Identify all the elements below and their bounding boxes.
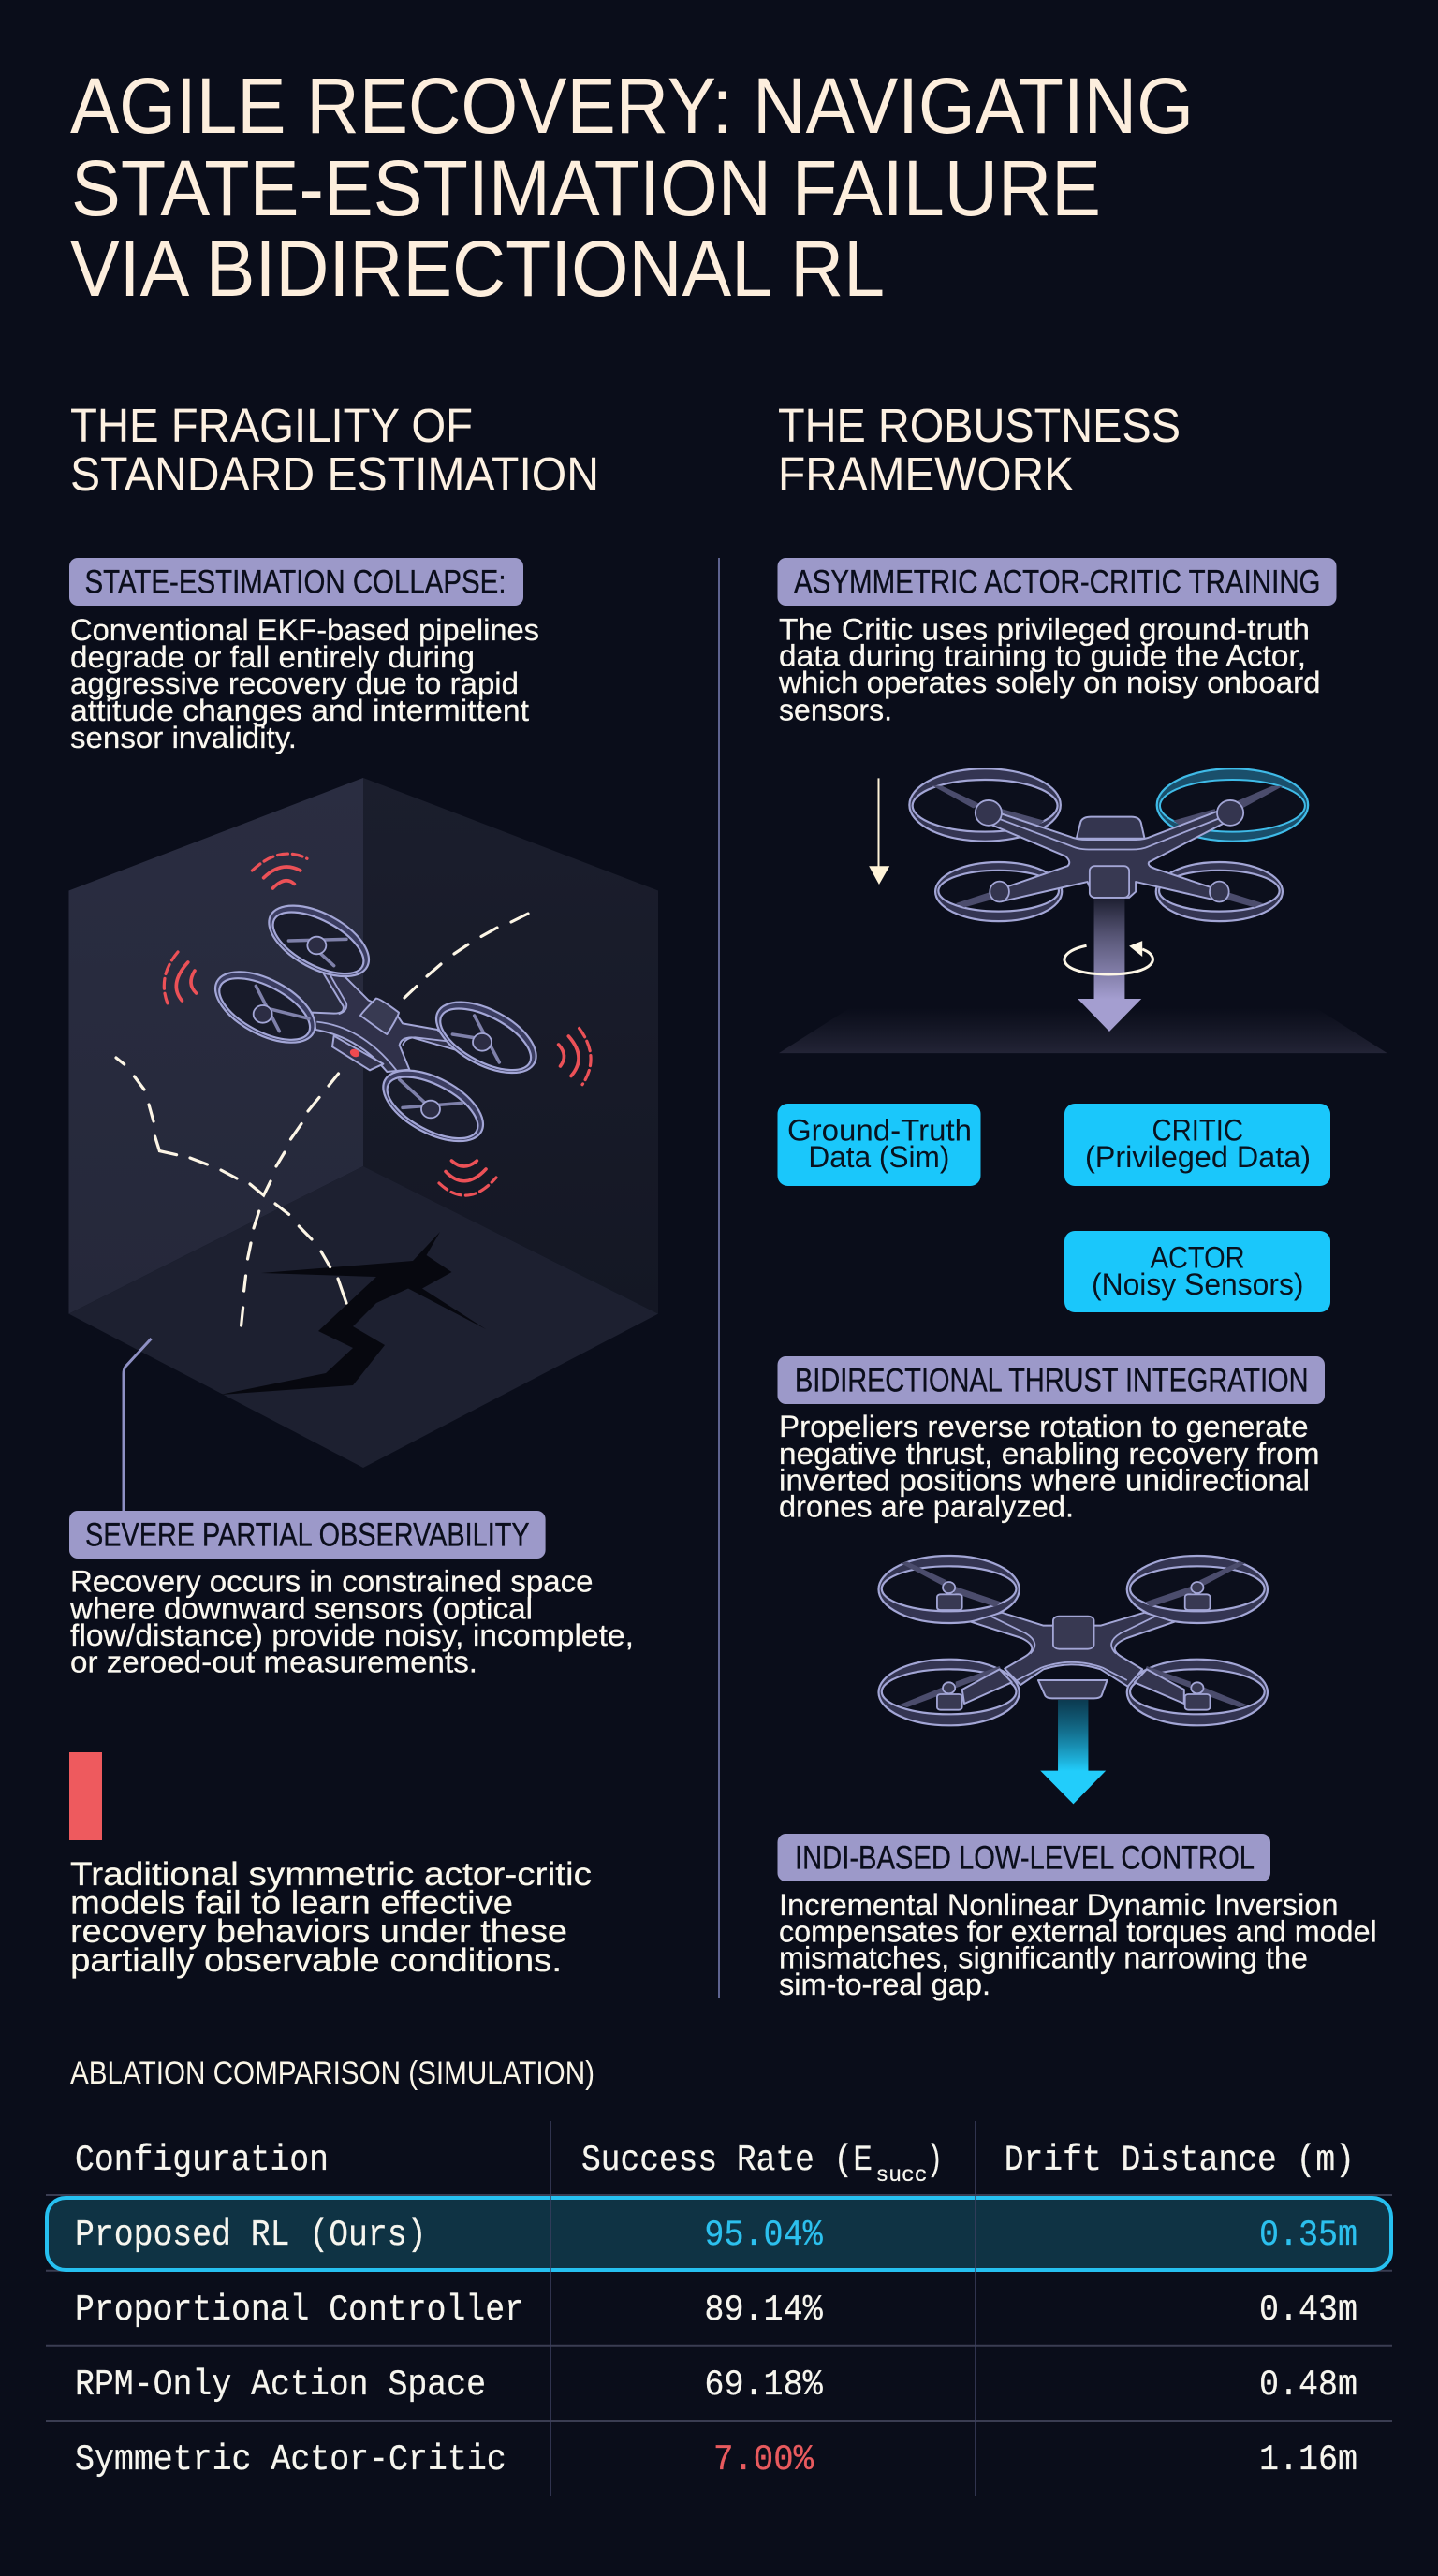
text: state-estimation collapse description: aggressive recovery due to rapid (70, 666, 519, 700)
title: VIA BIDIRECTIONAL RL (70, 225, 885, 313)
badge: severe partial observability: SEVERE PARTIAL OBSERVABILITY (85, 1516, 530, 1553)
heading: the robustness framework: FRAMEWORK (778, 447, 1074, 501)
room: floor (69, 1166, 658, 1468)
row: proposed rl: Proposed RL (Ours) (75, 2215, 427, 2256)
title (70, 62, 1194, 313)
text: severe partial observability description: Recovery occurs in constrained space (70, 1565, 594, 1599)
text: bidirectional thrust description (779, 1410, 1320, 1524)
text: asymmetric training description: data during training to guide the Actor, (779, 639, 1306, 673)
table heading: ABLATION COMPARISON (SIMULATION) (70, 2056, 594, 2091)
badge: bidirectional thrust integration (777, 1356, 1325, 1404)
text: severe partial observability description: flow/distance) provide noisy, incomplete, (70, 1618, 634, 1652)
row: symmetric actor-critic: Symmetric Actor-Critic (75, 2439, 506, 2481)
sensor noise arcs (164, 854, 591, 1195)
badge: asymmetric actor-critic training (777, 558, 1337, 606)
illustration: upright drone with gravity and yaw (779, 768, 1387, 1053)
rotors (909, 768, 1308, 921)
text: indi control description: mismatches, significantly narrowing the (779, 1941, 1308, 1975)
text: severe partial observability description: or zeroed-out measurements. (70, 1645, 477, 1678)
text: state-estimation collapse description (70, 613, 539, 754)
badge: state-estimation collapse (69, 558, 523, 606)
heading: the robustness framework (778, 399, 1181, 501)
text: asymmetric training description: sensors. (779, 693, 892, 726)
box: ground-truth data: Data (Sim) (808, 1140, 949, 1174)
box: actor (1064, 1231, 1330, 1312)
row: proposed rl: 0.35m (1259, 2215, 1357, 2256)
badge: indi-based low-level control: INDI-BASED LOW-LEVEL CONTROL (795, 1840, 1255, 1877)
rotation arc (1064, 941, 1152, 974)
row: rpm-only action space: 0.48m (1259, 2364, 1357, 2406)
badge: severe partial observability (69, 1511, 546, 1559)
text: symmetric actor-critic failure (70, 1856, 592, 1979)
comparison table (46, 2121, 1392, 2496)
gravity arrow (869, 778, 889, 885)
table header: Drift Distance (m) (1005, 2140, 1355, 2181)
heading: the robustness framework: THE ROBUSTNESS (778, 399, 1181, 452)
text: indi control description: compensates for external torques and model (779, 1914, 1377, 1948)
badge: bidirectional thrust integration: BIDIRECTIONAL THRUST INTEGRATION (795, 1363, 1309, 1399)
box: actor: ACTOR (1151, 1241, 1245, 1275)
row: proportional controller: 0.43m (1259, 2290, 1357, 2331)
room: right wall (363, 778, 658, 1314)
highlighted row (47, 2198, 1391, 2270)
illustration: inverted drone with negative thrust (878, 1556, 1268, 1804)
illustration: drone in constrained room (69, 778, 658, 1468)
text: bidirectional thrust description: negative thrust, enabling recovery from (779, 1437, 1320, 1471)
row: proportional controller: Proportional Controller (75, 2290, 524, 2331)
heading: the fragility of standard estimation: STANDARD ESTIMATION (70, 447, 599, 501)
text: bidirectional thrust description: inverted positions where unidirectional (779, 1463, 1310, 1497)
badge: state-estimation collapse: STATE-ESTIMATION COLLAPSE: (84, 564, 506, 601)
text: asymmetric training description: The Critic uses privileged ground-truth (779, 612, 1310, 646)
text: bidirectional thrust description: Propeliers reverse rotation to generate (779, 1410, 1309, 1443)
row: proportional controller (75, 2290, 1357, 2331)
table header: ) (927, 2140, 943, 2181)
text: state-estimation collapse description: attitude changes and intermittent (70, 694, 529, 727)
row: rpm-only action space: RPM-Only Action Space (75, 2364, 486, 2406)
leader line (124, 1339, 152, 1512)
text: symmetric actor-critic failure: recovery behaviors under these (70, 1913, 567, 1950)
table header: Success Rate (E (581, 2140, 873, 2181)
title: AGILE RECOVERY: NAVIGATING (70, 62, 1194, 150)
text: symmetric actor-critic failure: partially observable conditions. (70, 1942, 562, 1979)
text: severe partial observability description (69, 1565, 634, 1678)
row: proposed rl: 95.04% (704, 2215, 823, 2256)
text: indi control description: sim-to-real gap. (779, 1968, 990, 2001)
column divider (718, 558, 720, 1998)
drone: tilted quadcopter (204, 891, 548, 1156)
box: ground-truth data (777, 1104, 981, 1186)
table header (75, 2140, 1355, 2188)
row: symmetric actor-critic: 1.16m (1259, 2439, 1357, 2481)
badge: indi-based low-level control (777, 1834, 1270, 1881)
text: state-estimation collapse description: Conventional EKF-based pipelines (70, 613, 539, 647)
box: ground-truth data: Ground-Truth (787, 1114, 972, 1148)
text: state-estimation collapse description: degrade or fall entirely during (70, 640, 475, 674)
row: rpm-only action space (75, 2364, 1357, 2406)
row: rpm-only action space: 69.18% (704, 2364, 823, 2406)
title: STATE-ESTIMATION FAILURE (71, 144, 1101, 232)
heading: the fragility of standard estimation: THE FRAGILITY OF (70, 399, 473, 452)
text: indi control description (779, 1888, 1377, 2001)
text: asymmetric training description: which operates solely on noisy onboard (778, 666, 1320, 699)
table header: succ (876, 2163, 927, 2188)
negative thrust arrow (1040, 1700, 1106, 1804)
box: actor: (Noisy Sensors) (1092, 1267, 1303, 1301)
row: proposed rl (75, 2215, 1357, 2256)
box: critic: CRITIC (1152, 1114, 1243, 1148)
text: indi control description: Incremental Nonlinear Dynamic Inversion (779, 1888, 1339, 1922)
table header: Configuration (75, 2140, 329, 2181)
floor crack (220, 1232, 486, 1395)
text: symmetric actor-critic failure: Traditional symmetric actor-critic (70, 1856, 592, 1893)
drone body (937, 1613, 1210, 1710)
text: asymmetric training description (778, 612, 1320, 726)
room: left wall (69, 778, 363, 1314)
row: symmetric actor-critic: 7.00% (713, 2439, 814, 2481)
floor plane (779, 1008, 1387, 1053)
dashed trajectories (116, 914, 528, 1325)
heading: the fragility of standard estimation (70, 399, 599, 501)
text: severe partial observability description: where downward sensors (optical (69, 1591, 533, 1625)
red warning bar (69, 1752, 102, 1840)
thrust arrow (1078, 898, 1141, 1032)
text: symmetric actor-critic failure: models fail to learn effective (70, 1884, 513, 1921)
text: bidirectional thrust description: drones are paralyzed. (779, 1490, 1074, 1524)
badge: asymmetric actor-critic training: ASYMMETRIC ACTOR-CRITIC TRAINING (794, 564, 1320, 600)
row: symmetric actor-critic (75, 2439, 1357, 2481)
text: state-estimation collapse description: sensor invalidity. (70, 721, 297, 754)
rotors (878, 1556, 1268, 1725)
row: proportional controller: 89.14% (704, 2290, 823, 2331)
box: critic (1064, 1104, 1330, 1186)
drone body (976, 800, 1243, 902)
box: critic: (Privileged Data) (1085, 1140, 1311, 1174)
